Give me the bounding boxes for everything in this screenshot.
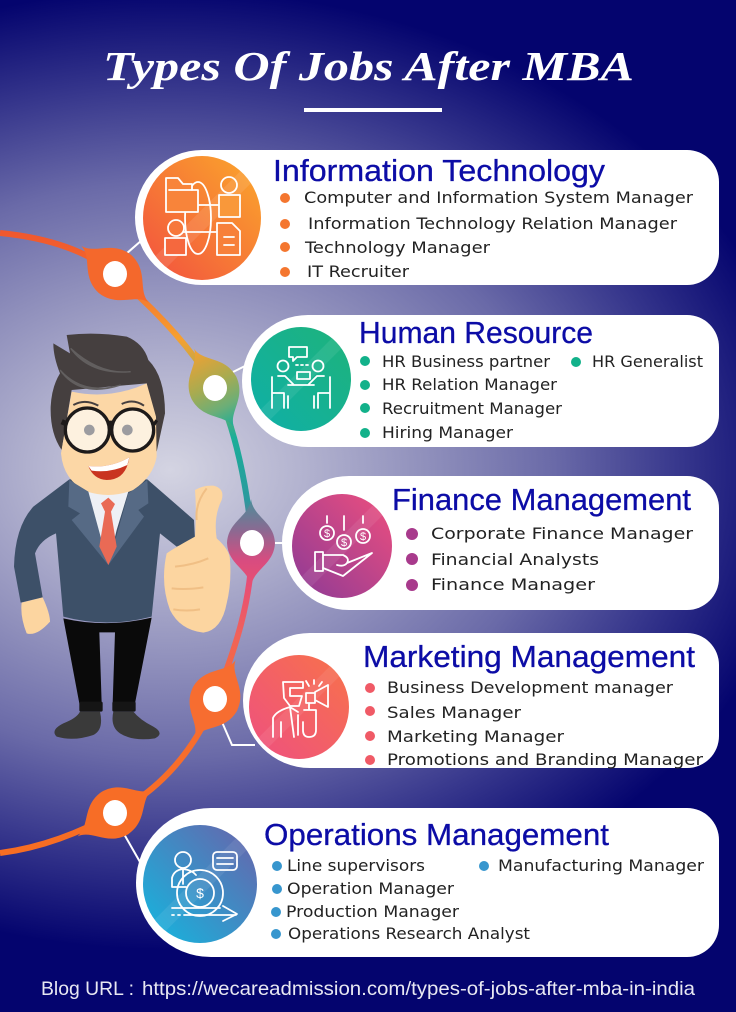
timeline node 5 xyxy=(103,800,127,826)
list items: Production Manager xyxy=(286,902,459,921)
icon: operations xyxy=(143,825,257,943)
timeline node 1 xyxy=(103,261,127,287)
list items: IT Recruiter xyxy=(307,262,409,281)
trousers xyxy=(63,618,152,703)
list items xyxy=(365,678,703,769)
connector lines xyxy=(124,240,290,862)
list items: Finance Manager xyxy=(431,575,595,594)
list items: Corporate Finance Manager xyxy=(431,524,693,543)
face xyxy=(61,383,157,495)
glasses xyxy=(65,408,109,452)
heading: Finance Management xyxy=(392,482,691,517)
panel: Operations Management xyxy=(136,808,719,957)
list items: HR Generalist xyxy=(592,352,703,371)
list items xyxy=(271,856,704,943)
icon: operations: $ xyxy=(196,885,204,901)
footer: blog URL: Blog URL : xyxy=(41,978,134,1000)
heading: Marketing Management xyxy=(363,639,695,674)
suit xyxy=(14,479,195,622)
timeline node 4 xyxy=(203,686,227,712)
mouth xyxy=(88,457,129,480)
icon: hand and coins xyxy=(292,494,392,598)
list items xyxy=(360,352,703,442)
list items: Financial Analysts xyxy=(431,550,599,569)
list items: Operations Research Analyst xyxy=(288,924,530,943)
icon: hand and coins: $ xyxy=(341,537,347,549)
panel: Information Technology xyxy=(135,150,719,285)
icon: IT network xyxy=(141,156,266,282)
list items: Promotions and Branding Manager xyxy=(387,750,703,769)
thumbs-up hand xyxy=(164,486,230,633)
title: Types Of Jobs After MBA xyxy=(103,43,634,89)
list items: HR Business partner xyxy=(382,352,550,371)
lapels xyxy=(68,480,148,565)
heading: Operations Management xyxy=(264,817,609,852)
hair xyxy=(51,334,165,452)
list items: Recruitment Manager xyxy=(382,399,562,418)
list items: Line supervisors xyxy=(287,856,425,875)
left hand xyxy=(21,597,50,634)
timeline node 3 xyxy=(240,530,264,556)
timeline node 2 xyxy=(203,375,227,401)
list items: Technology Manager xyxy=(304,238,490,257)
shirt xyxy=(87,492,128,565)
icon: hand and coins: $ xyxy=(360,531,366,543)
shoes xyxy=(54,712,160,739)
icon: man with megaphone xyxy=(249,655,349,759)
list items xyxy=(280,188,693,281)
list items: HR Relation Manager xyxy=(382,375,557,394)
list items: Manufacturing Manager xyxy=(498,856,704,875)
panel: Finance Management xyxy=(280,476,719,610)
list items: Operation Manager xyxy=(287,879,454,898)
icon: meeting xyxy=(251,327,351,431)
list items: Business Development manager xyxy=(387,678,673,697)
panel: Marketing Management xyxy=(237,633,719,769)
list items xyxy=(406,524,693,594)
panel: Human Resource xyxy=(239,315,719,447)
list items: Marketing Manager xyxy=(387,727,564,746)
tie xyxy=(99,498,117,565)
heading: Human Resource xyxy=(359,315,593,350)
list items: Hiring Manager xyxy=(382,423,513,442)
icon: hand and coins: $ xyxy=(324,528,330,540)
list items: Information Technology Relation Manager xyxy=(308,214,677,233)
title underline xyxy=(304,108,442,112)
list items: Sales Manager xyxy=(387,703,521,722)
heading: Information Technology xyxy=(273,153,606,188)
character: businessman thumbs up xyxy=(14,334,230,739)
list items: Computer and Information System Manager xyxy=(304,188,693,207)
footer: blog URL: https://wecareadmission.com/types-of-jobs-after-mba-in-india xyxy=(142,978,695,1000)
timeline rope xyxy=(0,227,275,858)
